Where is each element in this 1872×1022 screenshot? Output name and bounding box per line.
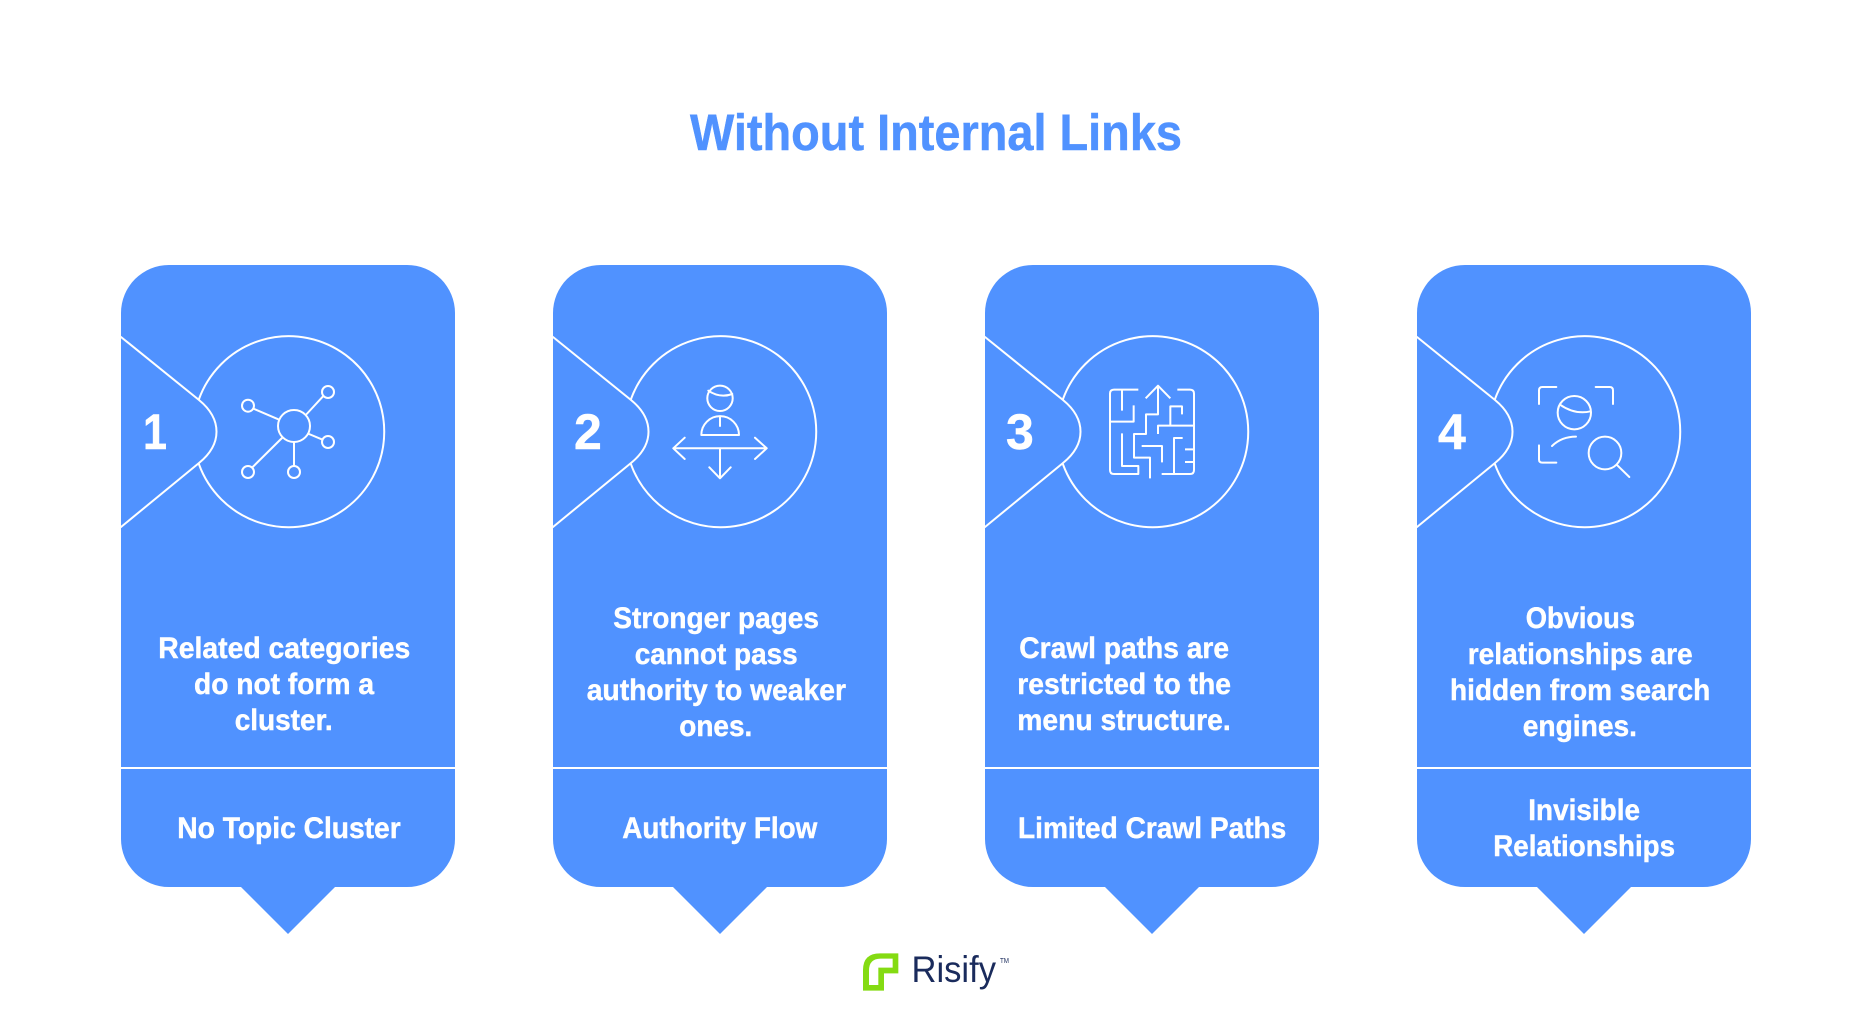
card body — [985, 265, 1319, 934]
number 2: 2 — [574, 404, 602, 460]
card label: Authority Flow — [622, 812, 817, 845]
number 4: 4 — [1438, 404, 1466, 460]
icon: person with arrows — [673, 386, 767, 478]
description text: relationships are — [1468, 638, 1693, 671]
icon circle — [199, 336, 384, 527]
description text: ones. — [679, 710, 752, 743]
title: Without Internal Links — [690, 104, 1182, 161]
card label — [1493, 794, 1675, 863]
card label: Relationships — [1493, 830, 1675, 863]
description text — [587, 602, 846, 743]
icon: network — [242, 386, 334, 478]
card body — [1417, 265, 1751, 934]
icon: logo mark — [863, 953, 898, 991]
panel: No Topic Cluster — [121, 265, 455, 934]
card label: No Topic Cluster — [177, 812, 401, 845]
description text: authority to weaker — [587, 674, 846, 707]
number 1: 1 — [143, 404, 167, 460]
description text: cluster. — [235, 704, 333, 737]
description text — [1017, 632, 1231, 737]
panel: Invisible Relationships — [1417, 265, 1751, 934]
icon: maze — [1110, 386, 1194, 478]
icon: person scan with magnifier — [1539, 387, 1629, 477]
logo wordmark: Risify — [912, 949, 996, 990]
number 3: 3 — [1006, 404, 1034, 460]
number wedge — [121, 337, 216, 527]
description text — [1450, 602, 1710, 743]
card label: Limited Crawl Paths — [1018, 812, 1286, 845]
panel: Authority Flow — [553, 265, 887, 934]
trademark: TM — [1000, 958, 1009, 965]
description text: engines. — [1523, 710, 1637, 743]
logo: Risify — [863, 949, 1009, 991]
description text: cannot pass — [635, 638, 798, 671]
description text: Crawl paths are — [1019, 632, 1229, 665]
card body — [553, 265, 887, 934]
description text: Stronger pages — [613, 602, 819, 635]
description text: hidden from search — [1450, 674, 1710, 707]
description text: restricted to the — [1017, 668, 1231, 701]
description text — [158, 632, 410, 737]
description text: do not form a — [194, 668, 375, 701]
description text: menu structure. — [1017, 704, 1231, 737]
card label: Invisible — [1528, 794, 1640, 827]
description text: Related categories — [158, 632, 410, 665]
panel: Limited Crawl Paths — [985, 265, 1319, 934]
description text: Obvious — [1526, 602, 1635, 635]
card shape — [121, 265, 455, 934]
